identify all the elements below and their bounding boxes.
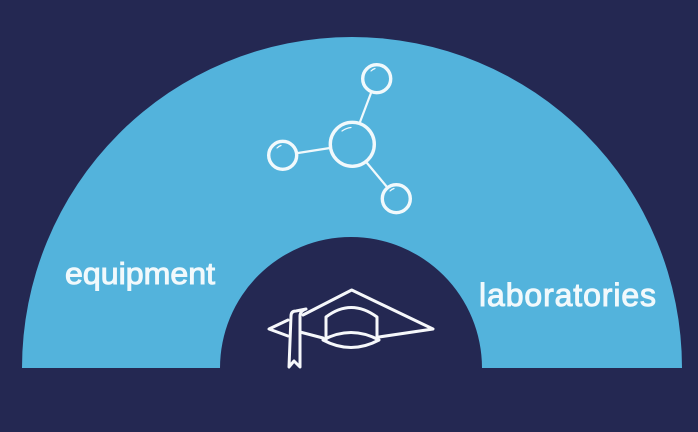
cap board [269, 290, 433, 338]
label: laboratories: laboratories [479, 277, 656, 313]
molecule lower right atom [382, 185, 410, 213]
panel: light blue semicircular arch [22, 37, 682, 368]
molecule bonds [298, 93, 387, 187]
cap band [323, 332, 379, 348]
molecule left atom [269, 141, 297, 169]
molecule central atom [330, 122, 374, 166]
cap tassel ribbon [289, 309, 306, 367]
molecule top atom [363, 65, 391, 93]
label: equipment: equipment [65, 256, 215, 291]
icon: graduation cap [269, 290, 433, 367]
icon: molecule [269, 65, 410, 213]
cap crown [326, 308, 377, 340]
